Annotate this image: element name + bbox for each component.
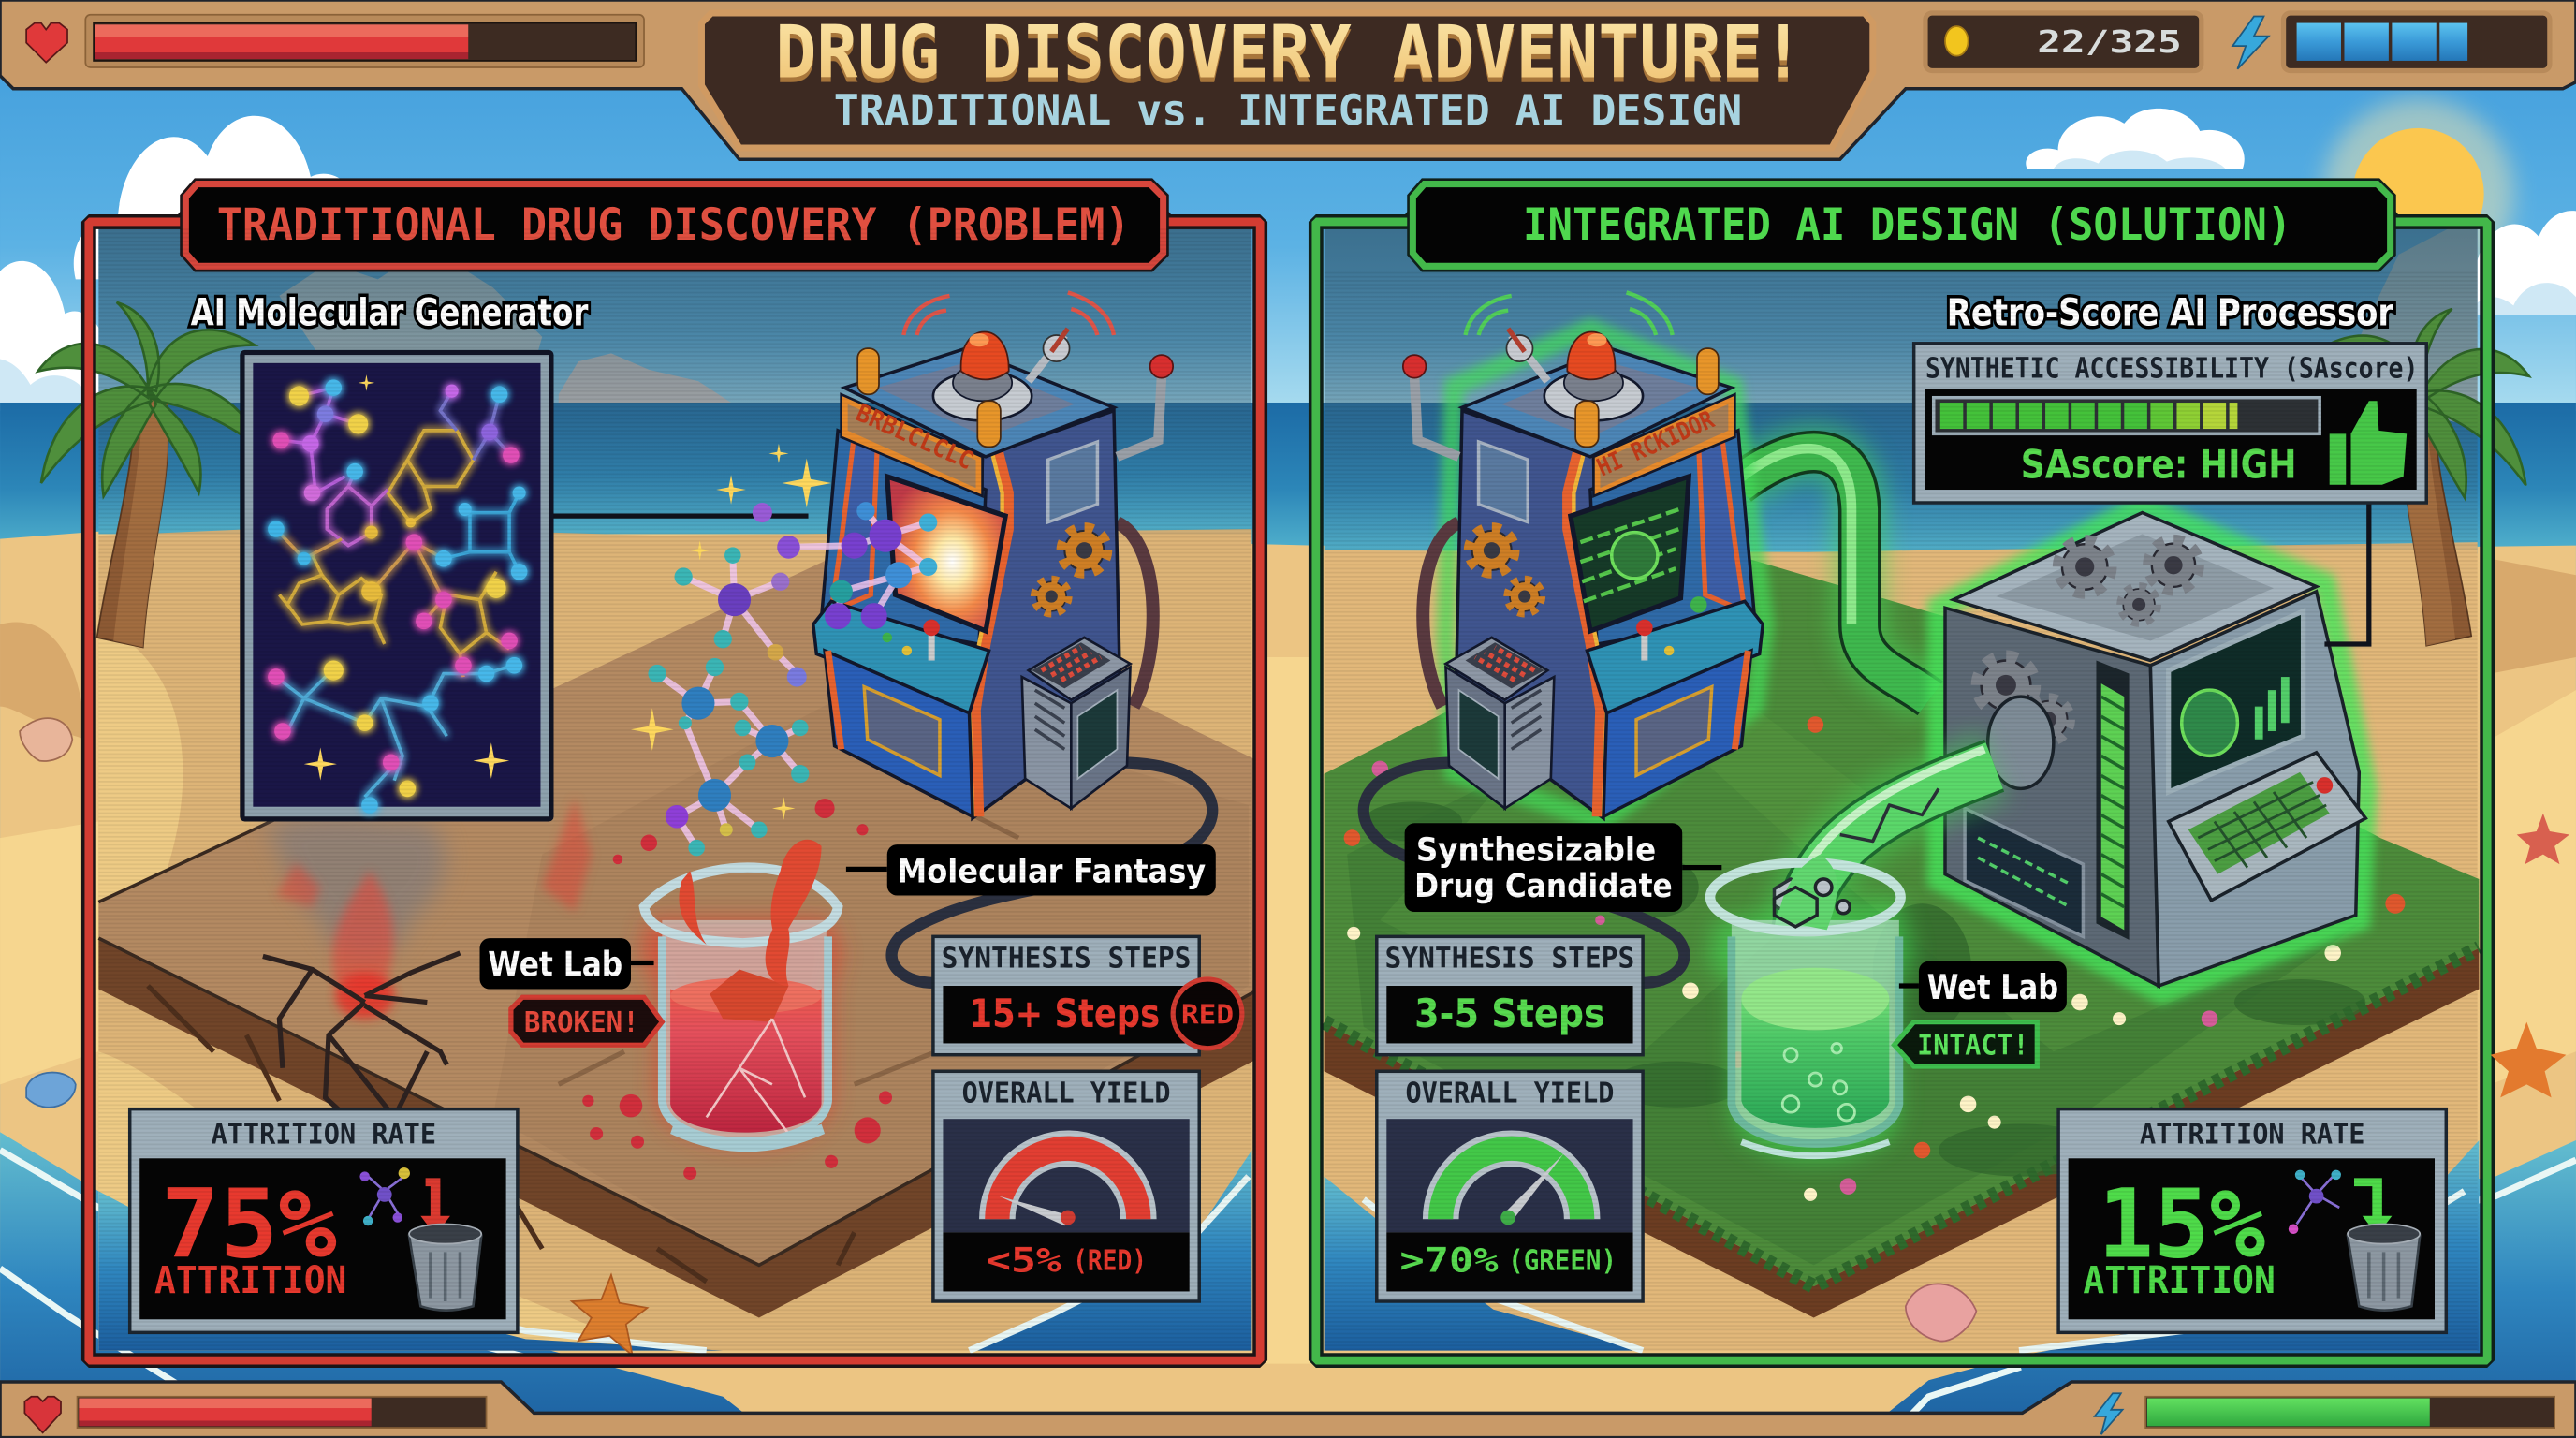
- molecular generator screen: [240, 350, 554, 822]
- screen brain: [2169, 611, 2304, 792]
- frame: right panel border: [1316, 213, 2487, 1360]
- controls: [883, 620, 940, 661]
- seashell: [20, 718, 72, 761]
- card: overall yield traditional: <5%: [986, 1240, 1061, 1280]
- signal arcs green: [1466, 292, 1673, 335]
- badge: red: RED: [1181, 999, 1234, 1030]
- card: attrition rate traditional: [130, 1109, 518, 1332]
- card: synthesis steps integrated: 3-5 Steps: [1414, 990, 1605, 1036]
- card: attrition rate traditional: 75%: [161, 1170, 337, 1281]
- label: wet lab left: Wet Lab: [488, 944, 622, 984]
- starfish right upper: [2517, 814, 2569, 864]
- beaker: broken wet lab: [582, 799, 892, 1180]
- card: synthesis steps traditional: SYNTHESIS STEPS: [942, 943, 1191, 976]
- label: molecular fantasy: [846, 844, 1216, 895]
- hud: coin counter: 22/325: [2037, 23, 2182, 60]
- plateau: cracked stone: [98, 557, 1265, 1318]
- cracks and smoke: [263, 797, 592, 1130]
- bottom health bar: [78, 1397, 487, 1428]
- hud: energy bar: [2284, 13, 2550, 70]
- card: attrition rate integrated: ATTRITION RATE: [2140, 1118, 2364, 1151]
- background: clouds: [0, 109, 2576, 403]
- label: ai molecular generator: AI Molecular Generator: [191, 290, 588, 334]
- floating molecules: [631, 444, 937, 856]
- card: overall yield integrated: (GREEN): [1508, 1245, 1617, 1278]
- beaker: intact wet lab: [1708, 855, 1914, 1160]
- background: water left: [0, 1132, 775, 1438]
- label: molecular fantasy: Molecular Fantasy: [897, 852, 1206, 890]
- panel backdrop: left: [98, 227, 1251, 1351]
- marquee gibberish right: HI RCKIDOR: [1593, 406, 1719, 482]
- label: synthesizable drug candidate: Drug Candidate: [1414, 867, 1673, 905]
- connector generator to machine: [554, 515, 809, 518]
- card: attrition rate integrated: ATTRITION: [2083, 1258, 2276, 1302]
- tube mouth collar: [1988, 697, 2054, 788]
- badge: intact: INTACT!: [1917, 1030, 2029, 1063]
- card: attrition rate integrated: [2058, 1109, 2446, 1332]
- hud: health bar: [85, 15, 644, 67]
- panel: traditional drug discovery: [37, 184, 1265, 1360]
- background: water right: [1856, 1140, 2576, 1438]
- panel: integrated ai design: [98, 184, 2529, 1360]
- card: sascore: SAscore: HIGH: [2021, 442, 2297, 488]
- card: synthesis steps traditional: 15+ Steps: [970, 990, 1160, 1036]
- gauge red: [997, 1149, 1138, 1225]
- icon: few molecules to trash: [2289, 1170, 2420, 1311]
- icon: molecules to trash: [359, 1167, 481, 1311]
- card: attrition rate traditional: ATTRITION RATE: [212, 1118, 436, 1151]
- label: synthesizable drug candidate: Synthesizable: [1416, 831, 1656, 870]
- connector sascore to processor: [2324, 503, 2369, 644]
- bottom lightning icon: [2095, 1393, 2123, 1434]
- keyboard: [2169, 753, 2365, 901]
- marquee gibberish left: BRBLCLCLC: [852, 400, 977, 476]
- green tube: [1774, 749, 1995, 930]
- hud: coin counter: [1925, 13, 2202, 70]
- card: attrition rate traditional: ATTRITION: [154, 1258, 346, 1302]
- title: DRUG DISCOVERY ADVENTURE!: [775, 10, 1804, 95]
- badge: broken: [511, 997, 662, 1045]
- background: sun: [2323, 98, 2513, 289]
- molecule in stream: [1774, 879, 1850, 927]
- gears left machine: [1034, 527, 1107, 614]
- background: sand: [0, 522, 2576, 1438]
- label: retro-score ai processor: Retro-Score AI Processor: [1947, 290, 2393, 334]
- background: sea: [0, 403, 2576, 559]
- controls right: [1636, 596, 1707, 661]
- hud: top bar: [0, 0, 2576, 159]
- pink shell bottom: [1906, 1284, 1976, 1342]
- card: synthesis steps integrated: SYNTHESIS STEPS: [1385, 943, 1634, 976]
- card: sascore: [1914, 344, 2426, 503]
- bottom heart: [24, 1397, 61, 1432]
- label: wet lab right: Wet Lab: [1927, 967, 2058, 1007]
- frame: left panel border: [89, 213, 1260, 1360]
- card: overall yield integrated: OVERALL YIELD: [1405, 1078, 1614, 1110]
- arcade machine left: [813, 292, 1212, 983]
- island: grass: [1325, 559, 2479, 1318]
- card: overall yield integrated: [1377, 1071, 1643, 1301]
- card: overall yield traditional: (RED): [1073, 1245, 1147, 1278]
- starfish left: [572, 1275, 648, 1356]
- sascore progress bar: [1940, 403, 2237, 429]
- icon: thumbs up: [2330, 401, 2407, 485]
- card: attrition rate integrated: 15%: [2098, 1170, 2265, 1281]
- beach decorations outside panels: [20, 718, 2569, 1342]
- title banner: problem: TRADITIONAL DRUG DISCOVERY (PROBLEM): [217, 199, 1131, 251]
- background: sky: [0, 0, 2576, 411]
- bottom energy bar: [2145, 1397, 2554, 1428]
- hud: lightning icon: [2232, 17, 2269, 69]
- exploding screen: [887, 477, 1005, 631]
- green code screen: [1571, 477, 1689, 631]
- badge: broken: BROKEN!: [524, 1006, 639, 1039]
- card: sascore: SYNTHETIC ACCESSIBILITY (SAscore): [1925, 353, 2418, 386]
- starfish right lower: [2491, 1022, 2566, 1097]
- card: overall yield integrated: >70%: [1399, 1240, 1499, 1280]
- hud: heart: [26, 23, 67, 63]
- card: overall yield traditional: OVERALL YIELD: [962, 1078, 1171, 1110]
- subtitle: TRADITIONAL vs. INTEGRATED AI DESIGN: [834, 85, 1742, 135]
- label: wet lab right: [1899, 961, 2067, 1012]
- hud: bottom bar: [0, 1382, 2576, 1438]
- processor machine: [1939, 506, 2365, 992]
- signal arcs red: [903, 292, 1114, 335]
- panel backdrop: right: [1325, 213, 2479, 1351]
- badge: intact: [1895, 1022, 2037, 1066]
- card: synthesis steps traditional: [933, 936, 1242, 1055]
- title banner: solution: INTEGRATED AI DESIGN (SOLUTION): [1523, 199, 2291, 251]
- card: overall yield traditional: [933, 1071, 1199, 1301]
- background: foam: [0, 1151, 2576, 1438]
- title banner: solution: [1412, 184, 2391, 266]
- palm tree right: [2309, 309, 2529, 646]
- label: synthesizable drug candidate: [1405, 823, 1721, 912]
- gauge green: [1441, 1149, 1582, 1225]
- card: synthesis steps integrated: [1377, 936, 1643, 1055]
- background: sand shading: [0, 559, 2576, 1364]
- gears right machine: [1469, 527, 1542, 614]
- badge: red: [1173, 979, 1242, 1049]
- arcade machine right: [1364, 292, 1764, 983]
- title banner: problem: [185, 184, 1164, 266]
- green pipe: [1738, 448, 1930, 698]
- palm tree left: [37, 302, 263, 647]
- blue shell: [26, 1073, 76, 1108]
- title plate: [701, 10, 1873, 148]
